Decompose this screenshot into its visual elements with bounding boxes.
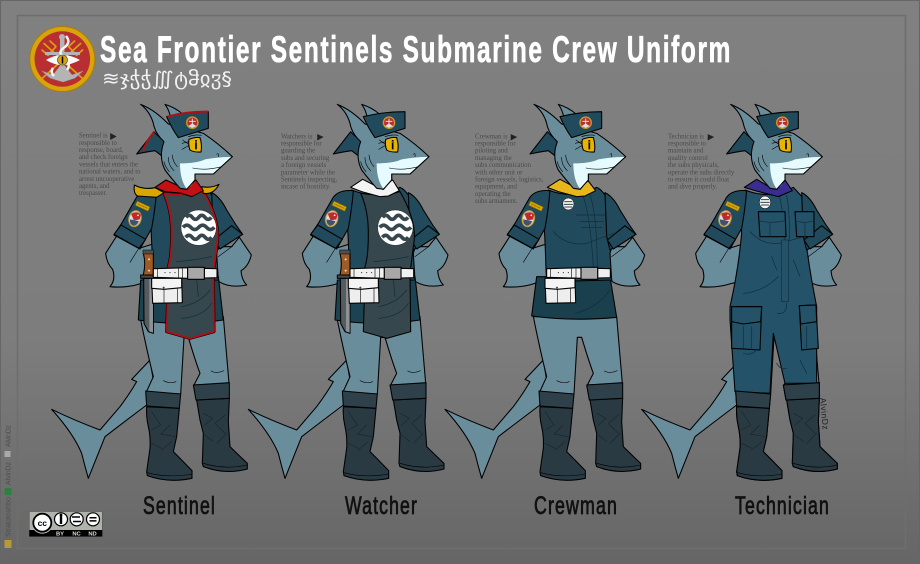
coverall pockets and zip: [732, 195, 818, 373]
purple neckerchief: [744, 179, 792, 197]
text block: Crewman description: operating the: [475, 191, 511, 198]
figure: Technician uniform: [642, 104, 841, 480]
text block: Watcher description: responsible for: [281, 140, 322, 148]
text block: Sentinel description: agents, and: [79, 183, 110, 190]
text block: Watcher description: subs and securing: [281, 155, 330, 162]
text block: Watcher description: Watchers is: [281, 133, 313, 140]
side credits: AlvinDz: [6, 424, 12, 447]
subtitle in constructed script: ≋ჯჭჭ∭ტჵჲჳ§: [102, 68, 232, 90]
text block: Crewman description: subs communication: [475, 162, 532, 169]
text block: Crewman description: Crewman is: [475, 133, 508, 140]
text block: Watcher description: incase of hostility.: [281, 184, 331, 191]
text block: Sentinel description: and check foreign: [79, 154, 128, 161]
side credits: AlvinDz: [6, 462, 12, 485]
icon: pointer: [110, 134, 116, 140]
side credits: Stratotoshbo: [6, 497, 12, 537]
license badge: CC BY-NC-ND: [29, 512, 102, 538]
label: Watcher: Watcher: [345, 492, 418, 520]
text block: Technician description: responsible to: [668, 140, 707, 148]
text block: Crewman description: responsible for: [475, 140, 516, 148]
red cap and fin trim: [143, 112, 208, 152]
license badge: CC BY-NC-ND: cc: [38, 518, 47, 528]
text block: Technician description: operate the subs directly: [668, 169, 735, 176]
text block: Technician description: and dive properly.: [668, 184, 717, 191]
text block: Crewman description: piloting and: [475, 148, 508, 155]
text block: Technician description: to ensure it could float: [668, 176, 729, 184]
emblem: Sea Frontier Sentinels logo: [30, 26, 95, 92]
text block: Sentinel description: response, board,: [79, 147, 124, 154]
label: Sentinel: Sentinel: [143, 492, 216, 520]
artist signature: AlvinDz: [818, 397, 831, 430]
text block: Technician description: the subs physicals,: [668, 162, 719, 169]
white collar: [351, 179, 399, 197]
gold epaulettes: [134, 184, 219, 197]
text block: Crewman description: foreign vessels, logistics,: [475, 176, 544, 184]
text block: Sentinel description: national waters, and to: [79, 169, 141, 176]
icon: pointer: [708, 134, 714, 140]
crewman skirt: [532, 277, 617, 319]
text block: Sentinel description: responsible to: [79, 140, 118, 147]
license badge: CC BY-NC-ND: ND: [88, 532, 97, 538]
yellow neckerchief: [547, 179, 596, 197]
figure: Crewman uniform: [445, 104, 645, 480]
license badge: CC BY-NC-ND: BY: [56, 532, 64, 538]
text block: Watcher description: guarding the: [281, 148, 315, 155]
text block: Technician description: quality control: [668, 155, 708, 162]
label: Technician: Technician: [735, 492, 830, 520]
text block: Watcher description: Sentinels inspecting,: [281, 176, 338, 184]
coverall: [730, 187, 817, 393]
text block: Crewman description: subs armament.: [475, 198, 518, 205]
text block: Crewman description: equipment, and: [475, 184, 518, 191]
text block: Sentinel description: Sentinel is: [79, 133, 108, 140]
text block: Crewman description: with other unit or: [475, 169, 523, 176]
text block: Watcher description: parameter while the: [281, 169, 335, 176]
text block: Sentinel description: trespasser.: [79, 190, 107, 197]
side credits: [4, 424, 12, 548]
watcher tabard: [361, 192, 414, 338]
icon: pointer: [511, 134, 516, 140]
license badge: CC BY-NC-ND: NC: [72, 532, 81, 538]
text block: Sentinel description: arrest uncooperative: [79, 176, 134, 183]
sentinel tabard with red trim: [164, 192, 218, 338]
text block: Technician description: maintain and: [668, 148, 704, 155]
text block: Watcher description: a foreign vessels: [281, 162, 327, 169]
figure: Watcher uniform: [248, 104, 448, 480]
icon: pointer: [318, 134, 323, 140]
label: Crewman: Crewman: [534, 492, 618, 520]
crewman shirt details: [553, 195, 613, 313]
text block: Crewman description: managing the: [475, 155, 512, 162]
red neckerchief: [155, 180, 203, 197]
text block: Sentinel description: vessels that enters the: [79, 161, 138, 168]
text block: Technician description: Technician is: [668, 133, 704, 140]
figure: Sentinel uniform: [52, 104, 251, 480]
